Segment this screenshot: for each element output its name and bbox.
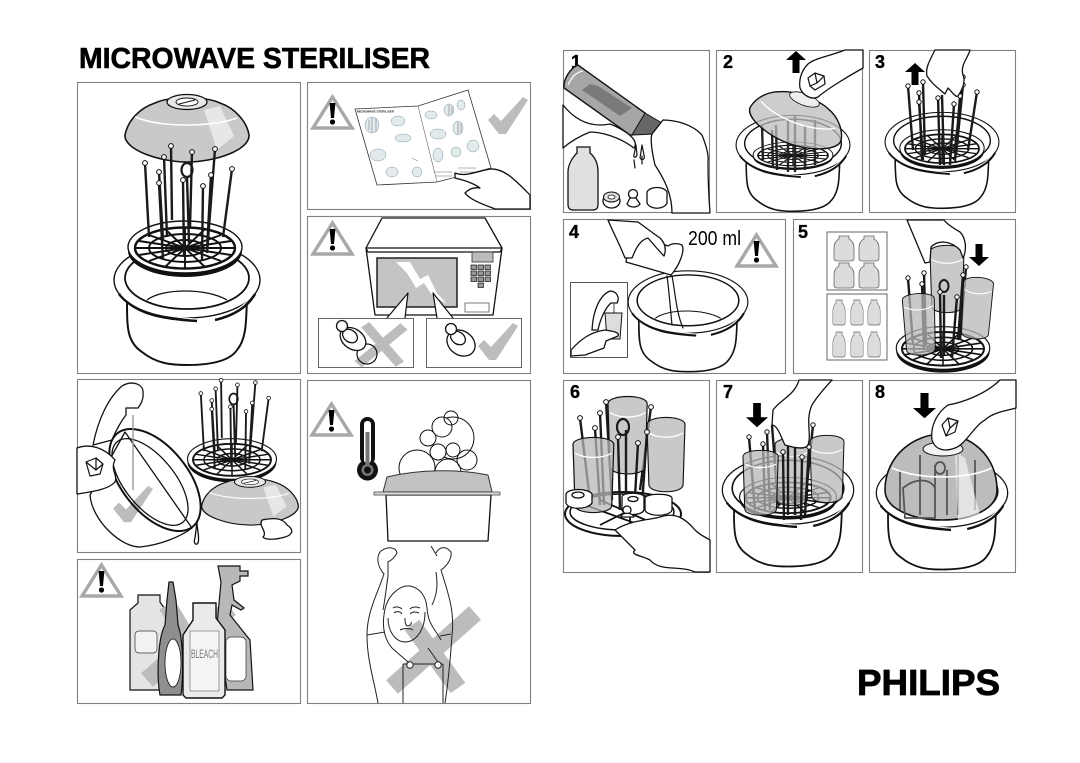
drips bbox=[634, 145, 644, 168]
hot steriliser bbox=[374, 471, 500, 541]
bottle: plain bbox=[130, 595, 167, 690]
rack bbox=[896, 327, 990, 373]
ring part bbox=[603, 192, 620, 208]
instruction leaflet bbox=[355, 90, 491, 185]
lid bbox=[125, 94, 249, 162]
dome highlight bbox=[892, 468, 992, 477]
right bottle bbox=[960, 276, 994, 340]
rack bbox=[128, 221, 242, 277]
warning triangle bbox=[313, 223, 352, 254]
panel: microwave bbox=[308, 216, 530, 374]
rack and rods bbox=[188, 378, 276, 482]
step number: 3 bbox=[875, 52, 885, 72]
down arrow bbox=[746, 403, 768, 427]
washers and cup bbox=[566, 490, 672, 517]
panel: washing parts bbox=[77, 378, 300, 552]
bottle: bleach bbox=[183, 603, 225, 698]
inset: teat without ring, allowed bbox=[426, 293, 522, 368]
bowl bbox=[722, 456, 854, 566]
warning triangle bbox=[82, 565, 121, 596]
inset: four wide bottles bbox=[827, 232, 887, 290]
title: MICROWAVE STERILISER bbox=[79, 43, 430, 75]
panel: no chemicals bbox=[78, 560, 300, 704]
rods bbox=[908, 267, 966, 358]
panel: step 6 bbox=[564, 380, 710, 572]
bottle part bbox=[568, 147, 598, 210]
panel: read the leaflet bbox=[308, 82, 530, 210]
puddle bbox=[261, 519, 292, 539]
hand placing bottle bbox=[907, 220, 965, 263]
teat part bbox=[627, 190, 640, 207]
step number: 4 bbox=[569, 222, 579, 242]
bottle being emptied bbox=[564, 65, 662, 135]
tall bottle bbox=[930, 245, 964, 313]
left arm bbox=[563, 105, 635, 148]
rack plate bbox=[565, 492, 681, 536]
hand bbox=[932, 380, 1016, 450]
hand lifting rack bbox=[927, 50, 970, 96]
microwave oven bbox=[366, 218, 502, 315]
steam clouds bbox=[399, 411, 477, 486]
bowl and rack bbox=[885, 112, 999, 208]
panel: exploded view of steriliser bbox=[78, 82, 300, 374]
step number: 2 bbox=[723, 52, 733, 72]
knob bbox=[923, 442, 963, 456]
bowl with rack bbox=[736, 115, 850, 211]
lid on its side bbox=[202, 476, 298, 525]
hand lifting lid bbox=[800, 50, 863, 98]
rods bbox=[143, 144, 234, 260]
rods through lid bbox=[762, 115, 815, 172]
hand holding jug bbox=[608, 220, 665, 258]
inset: teat with ring, not allowed bbox=[318, 293, 414, 368]
panel: step 7 bbox=[716, 380, 862, 572]
warning triangle bbox=[313, 97, 352, 128]
panel: step 3 bbox=[870, 50, 1016, 212]
front rods bbox=[578, 400, 653, 515]
left bottle bbox=[902, 293, 937, 356]
knob in hand bbox=[942, 418, 958, 436]
grey cross bbox=[392, 613, 475, 688]
inset: filling jug at tap bbox=[570, 282, 628, 358]
warning triangle bbox=[312, 404, 351, 435]
knob in hand bbox=[808, 73, 825, 90]
panel: step 1 bbox=[563, 50, 710, 213]
grey cross bbox=[147, 605, 230, 682]
rods behind bottles bbox=[580, 402, 651, 505]
dome lid bbox=[885, 434, 997, 520]
cap part bbox=[647, 188, 667, 208]
dome glare bbox=[955, 452, 980, 520]
panel: step 5 bbox=[794, 220, 1016, 374]
bowl bbox=[876, 459, 1008, 570]
up arrow bbox=[786, 51, 806, 73]
panel: step 4 bbox=[564, 220, 786, 374]
hand under rack bbox=[615, 515, 710, 572]
thermometer bbox=[357, 417, 378, 480]
water drop bbox=[194, 522, 199, 544]
panel: step 8 bbox=[870, 380, 1016, 572]
child reaching up bbox=[367, 546, 453, 703]
tall bottle bbox=[608, 396, 647, 474]
front rods bbox=[747, 423, 815, 520]
bottle: dropper bbox=[158, 582, 183, 695]
hand bbox=[772, 380, 832, 448]
right bottle bbox=[647, 417, 685, 492]
tilted bowl with check bbox=[90, 413, 218, 547]
hand holding bowl bbox=[77, 446, 116, 494]
right hand bbox=[651, 120, 710, 213]
knob in hand bbox=[86, 458, 103, 476]
hand pointing bbox=[455, 169, 530, 209]
rods bbox=[906, 75, 979, 165]
bowl bbox=[114, 242, 260, 365]
check mark bbox=[488, 97, 528, 134]
spray bottle bbox=[217, 566, 253, 690]
down arrow bbox=[969, 244, 989, 266]
inset: six narrow bottles bbox=[827, 294, 887, 360]
bowl bbox=[628, 271, 748, 372]
left bottle bbox=[743, 450, 778, 515]
panel: step 2 bbox=[716, 50, 863, 212]
bottle: bleach: BLEACH bbox=[191, 647, 218, 661]
down arrow bbox=[913, 393, 936, 418]
philips logo: PHILIPS bbox=[857, 662, 1000, 703]
step number: 1 bbox=[571, 52, 581, 72]
amount label: 200 ml bbox=[688, 228, 741, 250]
water stream bbox=[667, 276, 683, 328]
step number: 8 bbox=[875, 382, 885, 402]
warning triangle bbox=[737, 235, 776, 266]
right bottle bbox=[810, 435, 844, 503]
rod tips bbox=[906, 265, 968, 299]
step number: 7 bbox=[723, 382, 733, 402]
instruction leaflet: MICROWAVE STERILISER bbox=[357, 110, 395, 114]
step number: 6 bbox=[570, 382, 580, 402]
measuring jug bbox=[626, 235, 683, 275]
up arrow bbox=[905, 63, 925, 85]
rods behind bottles bbox=[749, 425, 813, 510]
centre bottle bbox=[775, 438, 809, 506]
bottles and rods inside dome bbox=[900, 455, 975, 518]
rack interior bbox=[740, 478, 836, 520]
tilted lid bbox=[743, 77, 852, 160]
step number: 5 bbox=[798, 222, 808, 242]
tap bbox=[93, 383, 143, 445]
left bottle bbox=[573, 437, 614, 513]
panel: hot steriliser and child bbox=[308, 380, 530, 704]
